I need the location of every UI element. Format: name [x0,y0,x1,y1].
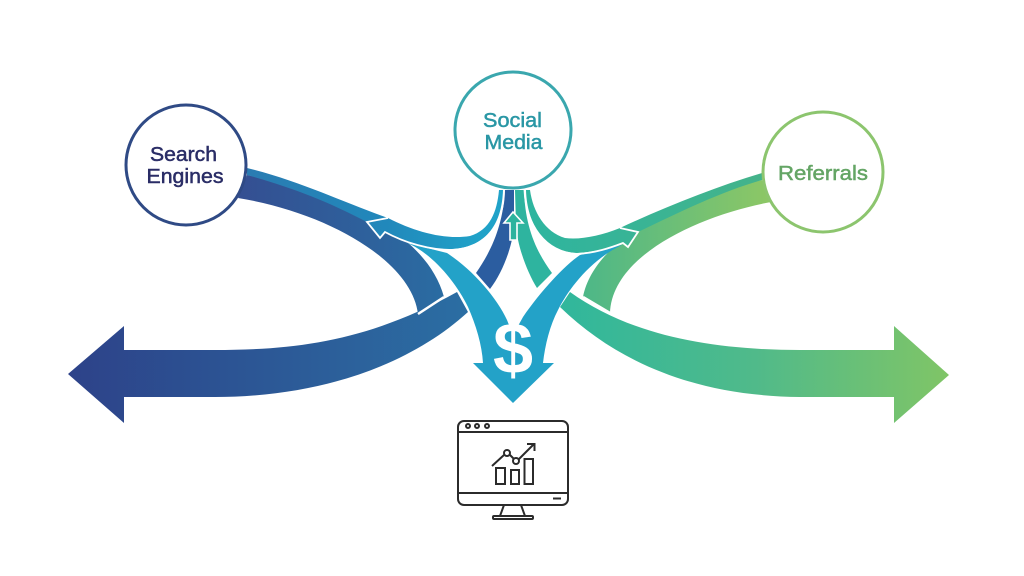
central down arrow with dollar sign [407,243,622,403]
social media left strand with arrow [247,168,504,250]
right output arrow [560,292,949,423]
referrals band [583,180,771,313]
node: search engines: Search [150,143,217,166]
white separator [418,297,444,314]
left output arrow [68,292,468,423]
node: search engines: Engines [146,165,224,188]
social media green strand [515,190,552,288]
node: social media: Social [483,109,542,132]
search engines band [238,175,444,314]
social media dark strand [476,190,514,289]
node: referrals: Referrals [778,162,868,185]
icon: monitor with chart [458,421,568,519]
up arrow [504,212,523,240]
dollar sign: $ [493,309,533,389]
node: social media [455,72,571,188]
white arrow outline [367,190,504,250]
node: social media: Media [484,131,543,154]
node: referrals [763,112,883,232]
social media right strand with arrow [524,173,762,254]
white arrow outline [524,190,638,254]
node: search engines [126,105,246,225]
